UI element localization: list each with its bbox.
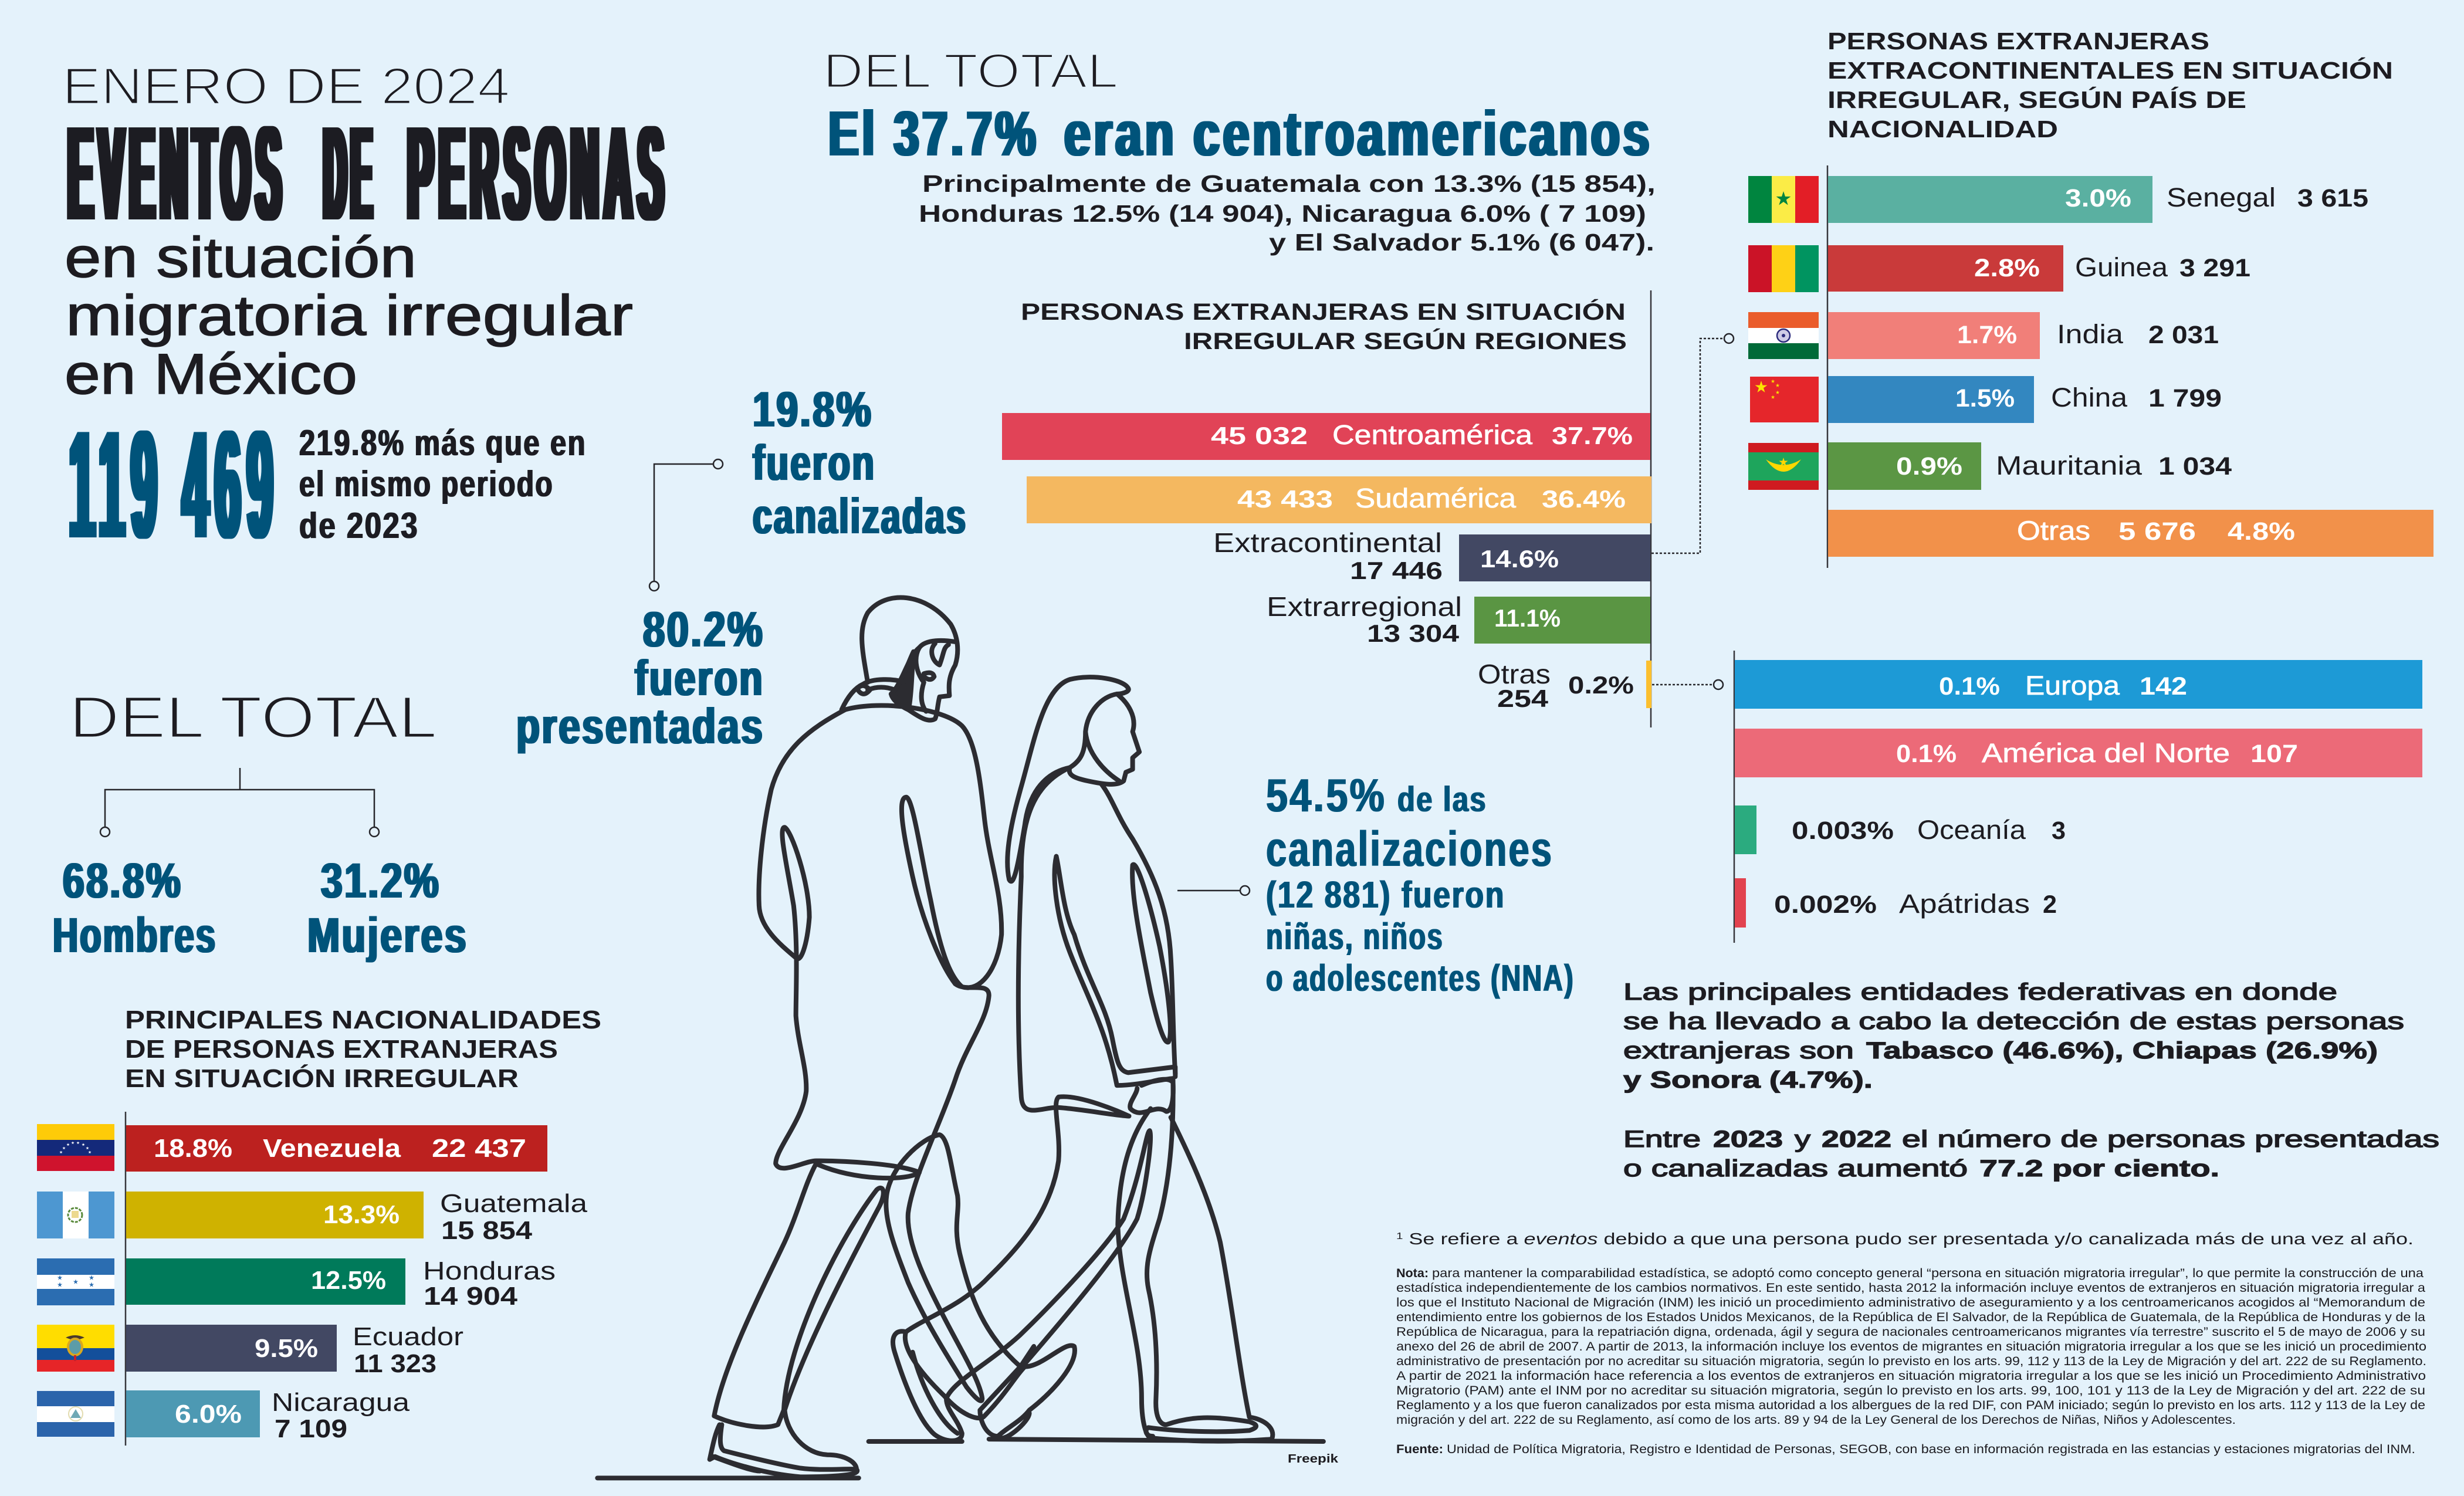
bar: América del Norte: América del Norte xyxy=(1982,738,2230,768)
methodological note: A partir de 2021 la información hace referencia a los eventos de extranjeros en situación migratoria irregular a los que se les inició un Procedimiento Administrativo xyxy=(1396,1369,2426,1383)
chart: regiones xyxy=(1002,290,1651,727)
stat: hombres xyxy=(53,853,217,963)
bar: Europa: 0.1% xyxy=(1939,672,2000,700)
callout: niñas, niños y adolescentes: de las xyxy=(1397,780,1487,819)
bar: Senegal: Senegal xyxy=(2167,182,2276,212)
heading: extracontinentales: IRREGULAR, SEGÚN PAÍS DE xyxy=(1827,86,2246,113)
main title: DE xyxy=(324,99,377,248)
subtitle: en situación xyxy=(65,225,417,289)
text: comparación anual: y xyxy=(1795,1126,1810,1152)
bar: Otras países xyxy=(1828,510,2433,557)
source: Unidad de Política Migratoria, Registro e Identidad de Personas, SEGOB, con base en información registrada en las estancias y estaciones migratorias del INM. xyxy=(1447,1443,2415,1456)
text: comparación anual: 2022 xyxy=(1822,1126,1891,1152)
chart: principales nacionalidades xyxy=(37,1112,588,1446)
stat: mujeres xyxy=(307,853,468,963)
bar: Oceanía: 0.003% xyxy=(1792,817,1894,845)
text: principales países centroamericanos: y El Salvador 5.1% (6 047). xyxy=(1269,229,1654,256)
total comparison note xyxy=(299,423,587,546)
methodological note: migración y del art. 222 de su Reglamento, así como de los arts. 89 y 94 de la Ley General de los Derechos de Niñas, Niños y Adolescentes. xyxy=(1396,1413,2236,1427)
flag: Ecuador xyxy=(37,1325,114,1372)
flag: Nicaragua xyxy=(37,1391,114,1437)
bar: Ecuador: Ecuador xyxy=(353,1322,463,1351)
bar: Centroamérica xyxy=(1002,413,1650,460)
bar: Honduras: Honduras xyxy=(423,1257,556,1285)
connector: niñas y niños xyxy=(1177,886,1250,895)
bar: Mauritania: 1 034 xyxy=(2158,452,2232,480)
text: comparación anual: el número de personas presentadas xyxy=(1902,1126,2439,1152)
text: comparación anual: 77.2 por ciento. xyxy=(1979,1156,2219,1182)
bar: Guinea: Guinea xyxy=(2075,252,2168,282)
text: principales países centroamericanos: Honduras 12.5% (14 904), Nicaragua 6.0% ( 7 109) xyxy=(919,200,1646,227)
bar: Apátridas: 0.002% xyxy=(1774,891,1877,919)
callout: niñas, niños y adolescentes xyxy=(1266,769,1575,999)
bar: Otras países: 4.8% xyxy=(2228,517,2295,546)
text: entidades federativas: se ha llevado a cabo la detección de estas personas xyxy=(1623,1008,2404,1034)
bar: Honduras xyxy=(126,1257,556,1311)
bar: China xyxy=(1828,376,2222,423)
callout: fueron canalizadas: canalizadas xyxy=(753,489,967,544)
chart: extracontinentales por país xyxy=(1748,165,2433,568)
heading: del total, sexo: DEL TOTAL xyxy=(69,685,437,750)
bar: Sudamérica: 43 433 xyxy=(1237,485,1333,513)
bar: América del Norte xyxy=(1735,729,2422,777)
methodological note: anexo del 26 de abril de 2007. A partir de 2013, la información incluye los eventos de migrantes en situación migratoria irregular a los que se les inició un procedimiento xyxy=(1396,1340,2426,1353)
callout: fueron presentadas: 80.2% xyxy=(643,602,764,658)
total comparison note: el mismo periodo xyxy=(299,464,554,505)
bar: Otras países: Otras xyxy=(2017,516,2090,546)
stat: mujeres: 31.2% xyxy=(321,853,441,908)
bar: Sudamérica: Sudamérica xyxy=(1355,483,1516,513)
methodological note: administrativo de presentación por no acreditar su situación migratoria, según lo previsto en los arts. 99, 112 y 113 de la Ley de Migración y del art. 222 de su Reglamento. xyxy=(1396,1355,2426,1368)
stat: mujeres: Mujeres xyxy=(307,908,468,963)
heading: principales nacionalidades: PRINCIPALES NACIONALIDADES xyxy=(125,1006,601,1034)
image credit: Freepik xyxy=(1288,1453,1339,1465)
bar: Venezuela: 18.8% xyxy=(154,1134,232,1163)
total comparison note: de 2023 xyxy=(299,506,419,546)
bar: India: 2 031 xyxy=(2148,321,2219,349)
bar: Otras regiones xyxy=(1478,659,1651,712)
text: principales países centroamericanos xyxy=(919,170,1656,256)
callout: fueron canalizadas: fueron xyxy=(753,435,876,491)
methodological note: entendimiento entre los gobiernos de los Estados Unidos Mexicanos, de la República de El Salvador, de la República de Guatemala, de la República de Honduras y de la xyxy=(1396,1311,2425,1324)
bar: China: 1.5% xyxy=(1955,384,2015,412)
bar: Extracontinental: 17 446 xyxy=(1350,557,1443,584)
callout: fueron canalizadas: 19.8% xyxy=(753,382,873,438)
flag: Senegal xyxy=(1748,176,1819,223)
bar: Oceanía xyxy=(1735,805,2066,854)
total comparison note: 219.8% más que en xyxy=(299,423,587,463)
connector: canalizadas and presentadas xyxy=(649,459,723,591)
bar: India: 1.7% xyxy=(1957,321,2017,349)
heading: principales nacionalidades: DE PERSONAS EXTRANJERAS xyxy=(125,1035,558,1064)
callout: niñas, niños y adolescentes: (12 881) fueron xyxy=(1266,874,1505,916)
bar: Venezuela: 22 437 xyxy=(432,1134,526,1163)
subtitle: en México xyxy=(65,342,357,406)
callout: niñas, niños y adolescentes: canalizaciones xyxy=(1266,821,1553,876)
bar: Extracontinental: Extracontinental xyxy=(1213,527,1442,558)
bar: India: India xyxy=(2057,319,2124,349)
bar: China: 1 799 xyxy=(2148,384,2222,412)
text: entidades federativas: Tabasco (46.6%), Chiapas (26.9%) xyxy=(1866,1038,2378,1064)
headline: centroamericanos xyxy=(828,98,1653,170)
bar: Europa xyxy=(1735,660,2422,709)
footnote: eventos debido a que una persona pudo ser presentada y/o canalizada más de una vez al año. xyxy=(1524,1230,2232,1248)
connector: extracontinental to countries xyxy=(1651,334,1734,553)
bar: Ecuador: 11 323 xyxy=(354,1349,436,1378)
methodological note: Migratorio (PAM) ante el INM por no acreditar su situación migratoria, según lo previsto en los arts. 99, 100, 101 y 113 de la Ley de Migración y del art. 222 de su xyxy=(1396,1384,2425,1397)
callout: fueron presentadas: presentadas xyxy=(516,699,764,754)
footnote: Se refiere a xyxy=(1403,1230,1524,1248)
methodological note: estadística independientemente de los cambios normativos. En este sentido, hasta 2012 la información incluye eventos de extranjeros en situación migratoria irregular a xyxy=(1396,1281,2425,1295)
flag: China xyxy=(1750,377,1819,422)
heading: principales nacionalidades xyxy=(125,1006,601,1093)
text: comparación anual: 2023 xyxy=(1713,1126,1783,1152)
text: entidades federativas xyxy=(1623,979,2404,1093)
bar: Apátridas: 2 xyxy=(2043,891,2057,919)
bar: Centroamérica: 45 032 xyxy=(1211,422,1308,449)
bar: Honduras: 14 904 xyxy=(424,1282,518,1311)
text: PERSONAS xyxy=(408,99,669,248)
bar: Europa: 142 xyxy=(2140,672,2187,700)
heading: extracontinentales: EXTRACONTINENTALES EN SITUACIÓN xyxy=(1827,57,2393,84)
flag: Honduras xyxy=(37,1258,114,1305)
callout: niñas, niños y adolescentes: niñas, niños xyxy=(1266,915,1444,957)
callout: niñas, niños y adolescentes: o adolescentes (NNA) xyxy=(1266,957,1575,999)
callout: fueron canalizadas xyxy=(753,382,967,544)
bar: Extracontinental: 14.6% xyxy=(1480,545,1559,573)
bar: Otras países: 5 676 xyxy=(2118,517,2196,546)
bar: Ecuador: 9.5% xyxy=(255,1334,318,1363)
headline: centroamericanos: El 37.7% xyxy=(828,98,1039,170)
text: entidades federativas: extranjeras son xyxy=(1623,1038,1854,1064)
bar: China: China xyxy=(2051,383,2128,412)
chart: otras regiones xyxy=(1734,651,2422,943)
bar: Honduras: 12.5% xyxy=(311,1266,386,1295)
bar: Centroamérica: 37.7% xyxy=(1552,422,1633,449)
methodological note xyxy=(1396,1267,2426,1427)
text: 119 469 xyxy=(69,400,279,570)
heading: según regiones xyxy=(1021,298,1627,354)
callout: niñas, niños y adolescentes: 54.5% xyxy=(1266,769,1386,821)
heading: del total centroamericanos: DEL TOTAL xyxy=(823,43,1118,98)
bar: Senegal: 3.0% xyxy=(2065,184,2131,212)
heading: según regiones: IRREGULAR SEGÚN REGIONES xyxy=(1184,327,1627,354)
heading: extracontinentales: NACIONALIDAD xyxy=(1827,116,2058,143)
bar: Extrarregional: Extrarregional xyxy=(1267,591,1462,622)
methodological note: para mantener la comparabilidad estadística, se adoptó como concepto general “persona en situación migratoria irregular”, lo que permite la construcción de una xyxy=(1432,1267,2424,1280)
heading: extracontinentales xyxy=(1827,28,2393,143)
stat: hombres: 68.8% xyxy=(63,853,182,908)
connector: otras to regions xyxy=(1652,680,1723,689)
bar: Extracontinental xyxy=(1213,527,1650,584)
bar: Guatemala: 13.3% xyxy=(323,1200,400,1229)
date heading: ENERO DE 2024 xyxy=(62,57,510,115)
heading: principales nacionalidades: EN SITUACIÓN IRREGULAR xyxy=(125,1064,519,1093)
bar: India xyxy=(1828,312,2219,359)
bar: Mauritania: 0.9% xyxy=(1896,452,1962,480)
bar: Guatemala: 15 854 xyxy=(441,1216,533,1245)
heading: según regiones: PERSONAS EXTRANJERAS EN SITUACIÓN xyxy=(1021,298,1626,325)
bar: Apátridas xyxy=(1735,878,2057,928)
bar: Centroamérica: Centroamérica xyxy=(1332,419,1532,450)
bar: Guatemala xyxy=(126,1189,588,1245)
bar: Nicaragua xyxy=(126,1388,410,1443)
flag: Guatemala xyxy=(37,1192,114,1238)
bar: América del Norte: 0.1% xyxy=(1896,740,1957,768)
bar: Guinea: 2.8% xyxy=(1974,254,2040,282)
headline: centroamericanos: eran centroamericanos xyxy=(1064,98,1653,170)
bar: Guatemala: Guatemala xyxy=(440,1189,588,1218)
text: comparación anual xyxy=(1623,1126,2439,1182)
bar: Senegal: 3 615 xyxy=(2297,184,2368,212)
bar: Senegal xyxy=(1828,176,2368,223)
main title: EVENTOS xyxy=(68,99,287,248)
bar: Apátridas: Apátridas xyxy=(1899,889,2030,919)
illustration: two people walking xyxy=(597,598,1324,1478)
methodological note: los que el Instituto Nacional de Migración (INM) les inició un procedimiento administrativo de aseguramiento y a los centroamericanos acogidos al “Memorandum de xyxy=(1396,1296,2425,1309)
bar: América del Norte: 107 xyxy=(2250,740,2298,768)
text: entidades federativas: Las principales entidades federativas en donde xyxy=(1623,979,2337,1005)
subtitle: migratoria irregular xyxy=(66,283,633,347)
bar: Mauritania xyxy=(1828,442,2232,490)
text: principales países centroamericanos: Principalmente de Guatemala con 13.3% (15 854), xyxy=(922,170,1656,197)
source: Fuente: xyxy=(1396,1443,1443,1456)
bar: Sudamérica: 36.4% xyxy=(1542,485,1626,513)
subtitle xyxy=(65,225,633,406)
bar: Mauritania: Mauritania xyxy=(1996,451,2143,480)
bar: Nicaragua: 6.0% xyxy=(175,1400,242,1429)
bar: Extrarregional: 11.1% xyxy=(1494,604,1561,632)
bar: Otras regiones: 254 xyxy=(1497,685,1549,712)
bar: Europa: Europa xyxy=(2025,671,2120,700)
bar: Oceanía: Oceanía xyxy=(1917,815,2026,845)
bar: Extrarregional xyxy=(1267,591,1650,647)
flag: Guinea xyxy=(1748,245,1819,292)
bar: Sudamérica xyxy=(1027,476,1651,523)
methodological note: República de Nicaragua, para la repatriación digna, ordenada, ágil y segura de nacionales centroamericanos migrantes vía terrestre” suscrito el 5 de mayo de 2006 y su xyxy=(1396,1325,2425,1339)
bar: Otras regiones: Otras xyxy=(1478,659,1551,689)
bar: Guinea xyxy=(1828,245,2250,292)
tree connector: sexo xyxy=(100,768,379,837)
bar: Nicaragua: Nicaragua xyxy=(272,1388,410,1417)
text: comparación anual: o canalizadas aumentó xyxy=(1623,1156,1968,1182)
bar: Ecuador xyxy=(126,1322,463,1378)
heading: extracontinentales: PERSONAS EXTRANJERAS xyxy=(1827,28,2209,55)
bar: Extrarregional: 13 304 xyxy=(1367,620,1460,647)
bar: Venezuela: Venezuela xyxy=(263,1134,401,1163)
bar: Oceanía: 3 xyxy=(2052,817,2066,845)
stat: hombres: Hombres xyxy=(53,908,217,963)
flag: India xyxy=(1748,312,1819,359)
callout: fueron presentadas xyxy=(516,602,764,754)
text: comparación anual: Entre xyxy=(1623,1126,1701,1152)
methodological note: Reglamento y a los que fueron canalizados por esta misma autoridad a los albergues de la red DIF, con PAM iniciado; según lo previsto en los arts. 112 y 113 de la Ley de xyxy=(1396,1399,2425,1412)
flag: Venezuela xyxy=(37,1124,114,1171)
text: entidades federativas: y Sonora (4.7%). xyxy=(1623,1067,1873,1093)
flag: Mauritania xyxy=(1748,443,1819,490)
bar: Guinea: 3 291 xyxy=(2179,254,2250,282)
methodological note: Nota: xyxy=(1396,1267,1429,1280)
footnote: 1 xyxy=(1396,1231,1403,1241)
callout: fueron presentadas: fueron xyxy=(635,651,764,706)
bar: Nicaragua: 7 109 xyxy=(275,1414,347,1443)
bar: Venezuela xyxy=(126,1125,547,1172)
bar: Otras regiones: 0.2% xyxy=(1568,671,1634,699)
